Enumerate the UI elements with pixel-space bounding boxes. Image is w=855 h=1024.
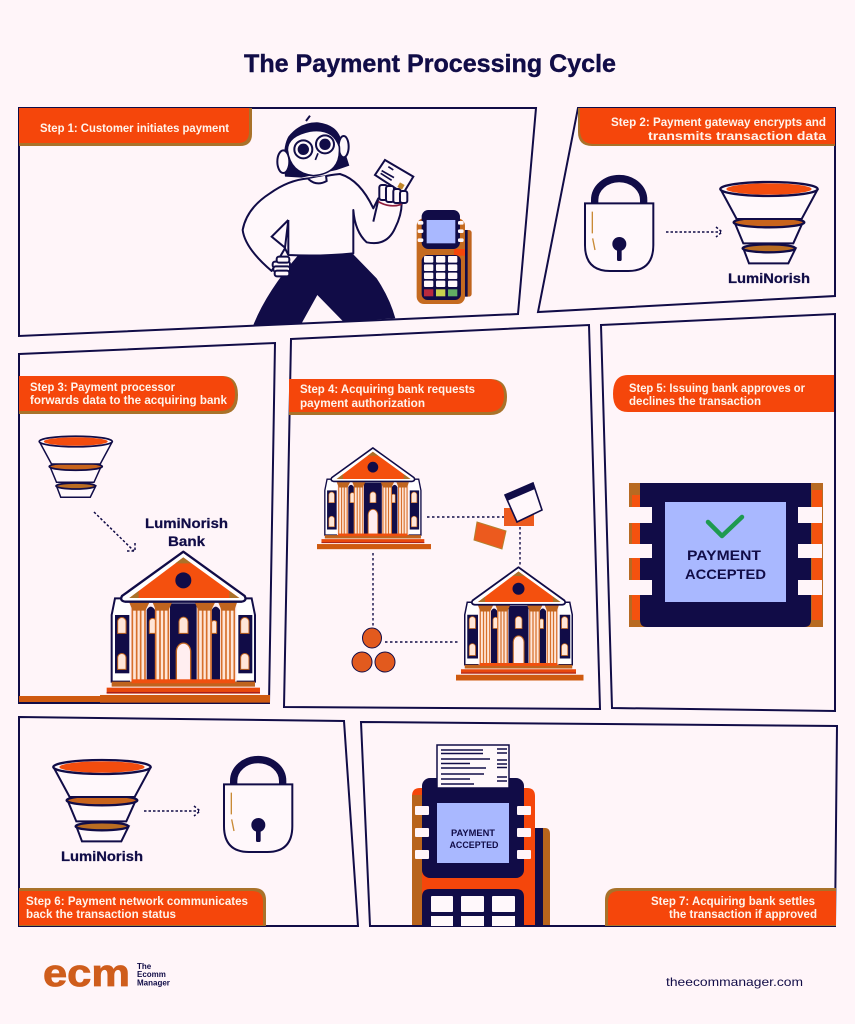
logo: The Ecomm Manager: Ecomm: [137, 970, 166, 979]
website url: theecommanager.com: [666, 975, 803, 989]
icon: funnel: [53, 760, 151, 841]
logo: The Ecomm Manager: Manager: [137, 978, 170, 988]
title: The Payment Processing Cycle: [244, 50, 616, 78]
icon: funnel: [39, 436, 112, 497]
receipt: [437, 745, 509, 788]
panel: step 7 acquiring bank settles: [361, 722, 837, 926]
payment accepted text: PAYMENT: [687, 547, 762, 563]
payment accepted text: ACCEPTED: [450, 840, 499, 850]
step 4 label: [289, 379, 507, 415]
step 2 label: transmits transaction data: [648, 131, 827, 143]
step 3 label: forwards data to the acquiring bank: [30, 395, 228, 407]
keypad: [422, 889, 524, 926]
panel: step 4 acquiring bank requests authorization: [284, 325, 600, 709]
panel: step 5 issuing bank approves: [601, 314, 835, 711]
step 6 label: [19, 888, 266, 926]
step 2 label: [578, 108, 835, 146]
step 7 label: [605, 888, 836, 926]
LumiNorish label: LumiNorish: [61, 848, 143, 864]
step 7 label: the transaction if approved: [669, 909, 817, 921]
logo: The Ecomm Manager: ecm: [43, 953, 130, 995]
payment accepted text: [685, 547, 766, 582]
icon: large bank: [100, 552, 270, 703]
step 6 label: back the transaction status: [26, 909, 176, 921]
dotted arrow: [94, 512, 135, 551]
dotted arrow: [144, 806, 200, 816]
step 5 label: [613, 375, 834, 412]
icon: padlock: [224, 760, 292, 852]
LumiNorish Bank label: Bank: [168, 533, 205, 549]
panel: step 3 processor forwards data: [19, 343, 275, 703]
payment accepted text: PAYMENT: [451, 828, 496, 838]
icon: padlock: [585, 179, 653, 271]
step 2 label: Step 2: Payment gateway encrypts and: [611, 117, 826, 129]
dotted arrow: [666, 227, 722, 237]
icon: check mark: [708, 517, 742, 536]
step 4 label: Step 4: Acquiring bank requests: [300, 384, 475, 396]
icon: cards and notepad: [474, 483, 542, 549]
step 7 label: Step 7: Acquiring bank settles: [651, 896, 815, 908]
icon: issuing bank: [456, 567, 584, 680]
dotted connectors: [373, 517, 520, 642]
icon: acquiring bank: [317, 448, 431, 549]
LumiNorish label: LumiNorish: [728, 270, 810, 286]
payment accepted text: ACCEPTED: [685, 566, 766, 582]
floor strip: [19, 696, 109, 702]
step 4 label: payment authorization: [300, 398, 425, 410]
logo: The Ecomm Manager: [43, 953, 170, 995]
panel: step 2 gateway encrypts: [538, 108, 835, 312]
step 1 label: [19, 108, 252, 146]
logo: The Ecomm Manager: The: [137, 962, 152, 971]
payment accepted text: [450, 828, 499, 850]
card terminal: [412, 745, 550, 926]
panel: step 6 network communicates back: [19, 717, 358, 926]
step 5 label: Step 5: Issuing bank approves or: [629, 383, 806, 395]
step 1 label: Step 1: Customer initiates payment: [40, 123, 229, 135]
step 3 label: Step 3: Payment processor: [30, 382, 176, 394]
step 3 label: [19, 376, 238, 414]
icon: coins: [352, 628, 395, 672]
icon: funnel: [720, 182, 818, 263]
payment terminal screen: [628, 483, 823, 627]
step 5 label: declines the transaction: [629, 396, 761, 408]
step 6 label: Step 6: Payment network communicates: [26, 896, 248, 908]
LumiNorish Bank label: LumiNorish: [145, 515, 228, 531]
illustration: customer with card: [243, 116, 472, 325]
panel: step 1 customer initiates payment: [19, 108, 536, 336]
LumiNorish Bank label: [145, 515, 228, 549]
